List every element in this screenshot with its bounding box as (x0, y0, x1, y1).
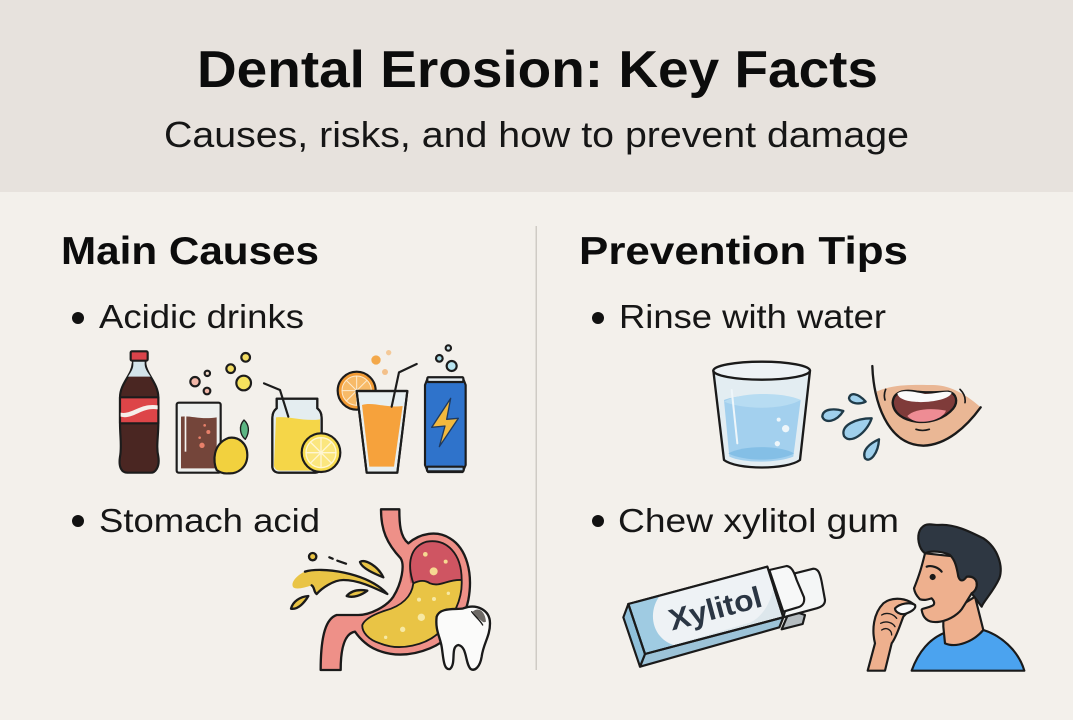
tooth (436, 607, 490, 670)
bullet: chew xylitol gum: Chew xylitol gum (618, 502, 899, 539)
icon: water droplets (822, 394, 879, 460)
icon: open mouth (872, 366, 981, 446)
bullet: rinse with water: Rinse with water (619, 298, 886, 335)
icon: soda glass with lemon (177, 353, 251, 473)
icon: lemonade jar with straw (264, 383, 340, 473)
gum wrapper (623, 567, 783, 667)
icon: water glass and mouth (713, 362, 981, 467)
bullet: stomach acid: Stomach acid (99, 502, 320, 539)
icon: orange juice glass (338, 350, 417, 473)
hand with gum (868, 599, 915, 671)
gum brand label: Xylitol (665, 581, 766, 637)
icon: acidic drinks row (120, 345, 466, 473)
panel: main causes (61, 230, 490, 670)
subtitle: Causes, risks, and how to prevent damage (164, 114, 909, 155)
bullet: acidic drinks: Acidic drinks (99, 298, 304, 335)
gum sticks (769, 566, 825, 629)
acid splash (291, 553, 387, 609)
header band (0, 0, 1073, 192)
heading: main causes: Main Causes (61, 230, 319, 273)
panel: prevention tips (579, 230, 1024, 671)
icon: cola bottle (120, 351, 159, 473)
hair (918, 524, 1001, 607)
icon: glass of water (713, 362, 810, 467)
face (914, 553, 977, 622)
icon: xylitol gum pack (623, 566, 825, 667)
icon: stomach with acid and tooth (291, 509, 490, 670)
heading: prevention tips: Prevention Tips (579, 230, 908, 273)
title: Dental Erosion: Key Facts (197, 41, 878, 99)
neck and shirt (912, 597, 1024, 671)
icon: energy drink can (425, 345, 466, 472)
icon: person chewing gum (868, 524, 1024, 671)
stomach (321, 509, 470, 670)
eye and brow (927, 566, 942, 579)
